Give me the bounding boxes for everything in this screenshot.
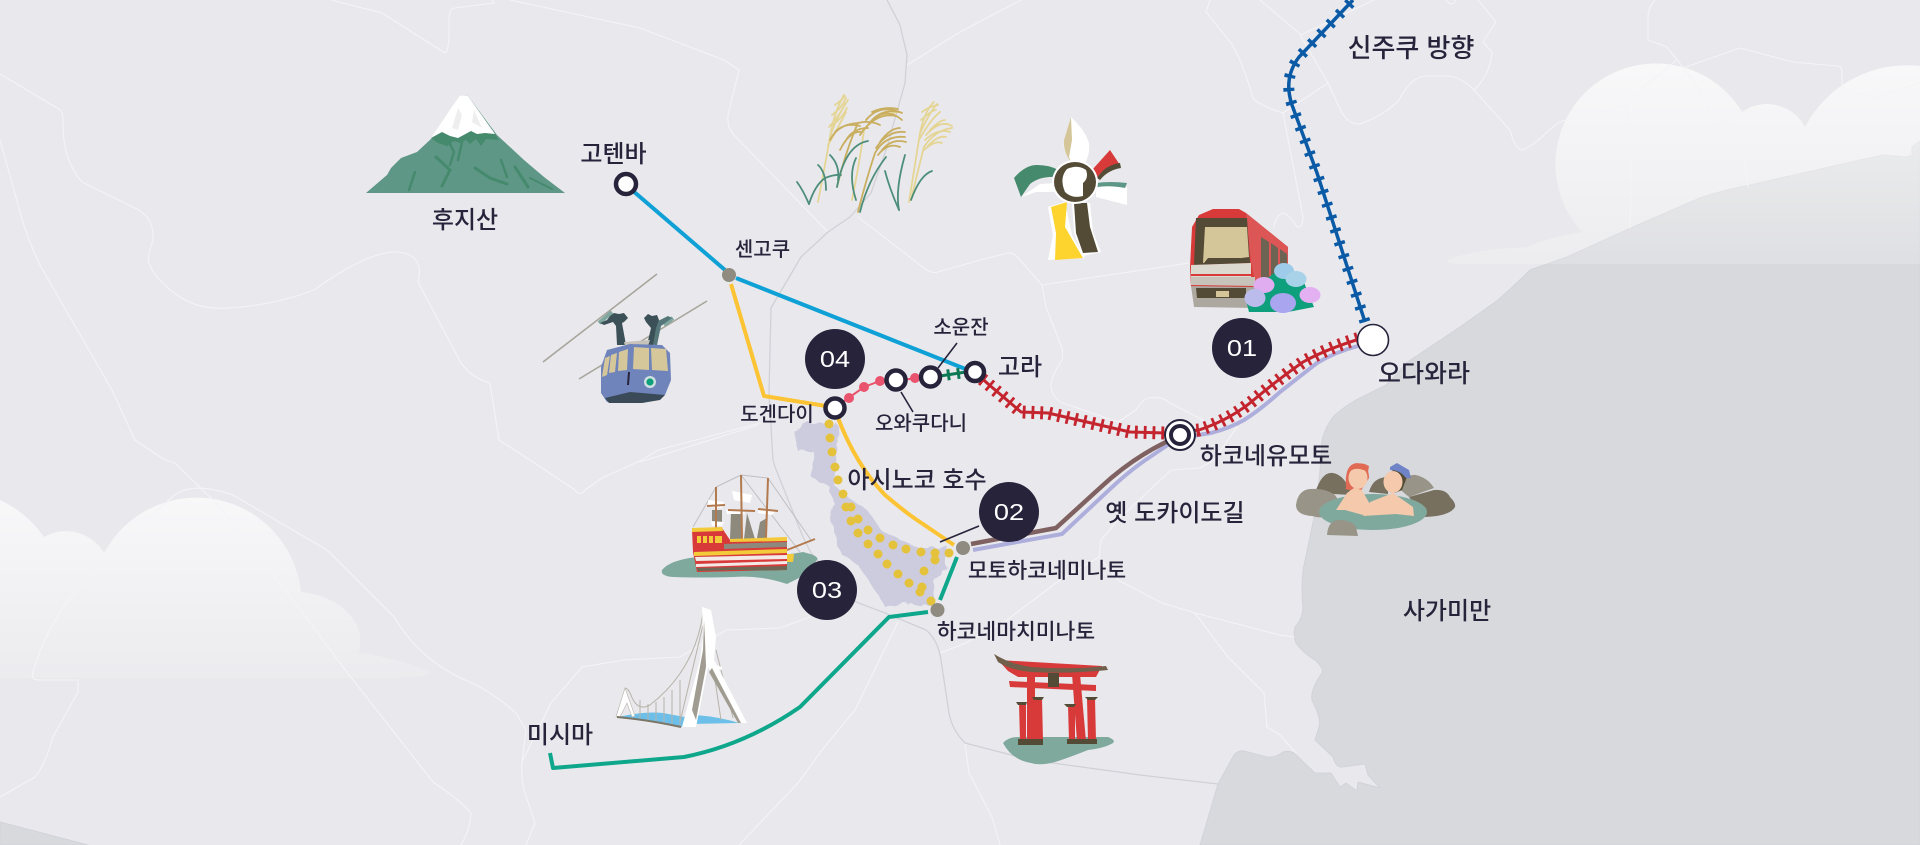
illustration: Mount Fuji [366,95,565,193]
route: yellow dotted ferry [824,420,954,606]
illustration: torii gate [994,654,1114,764]
number badges: 03 [812,578,842,603]
illustration: suspension bridge [616,607,747,727]
route: pink cable car [840,373,925,404]
route: green cable ties [940,372,966,376]
label: 후지산: 후지산 [432,207,498,234]
illustration: hot spring bathers [1296,463,1455,536]
route: brown line [971,435,1180,544]
place labels: 하코네마치미나토 [937,620,1095,644]
place labels [527,33,1491,749]
place labels: 사가미만 [1403,598,1491,625]
route: teal line [550,557,957,768]
place labels: 오다와라 [1378,360,1470,388]
illustration: pirate ship [662,475,817,584]
place labels: 신주쿠 방향 [1348,33,1474,63]
cloud: top right [1448,63,1920,264]
place labels: 센고쿠 [735,238,790,261]
place labels: 옛 도카이도길 [1105,500,1245,527]
place labels: 소운잔 [933,316,989,339]
illustration: ropeway gondola [543,274,707,403]
number badges: 04 [820,347,850,372]
place labels: 도겐다이 [740,403,814,426]
place labels: 하코네유모토 [1200,443,1332,470]
number badges: 01 [1227,336,1257,361]
place labels: 미시마 [527,722,593,749]
place labels: 고텐바 [580,141,647,168]
route: blue ropeway line [632,190,968,370]
route: yellow bus line [731,284,954,545]
place labels: 오와쿠다니 [875,412,967,435]
route: lilac line [973,346,1358,550]
number badges [797,318,1272,620]
place labels: 아시노코 호수 [847,467,987,494]
route: Odawara to Shinjuku track [1289,0,1365,322]
route: Hakone Tozan red track [975,335,1373,433]
stations [616,174,1388,617]
illustration: pampas grass [797,95,952,212]
lake: Ashinoko [793,423,948,607]
illustration: sculpture [1014,117,1127,260]
illustration: red train with hydrangeas [1190,209,1320,313]
leader lines [901,343,979,542]
cloud: bottom left [0,498,431,678]
place labels: 고라 [998,354,1042,381]
number badges: 02 [994,500,1024,525]
place labels: 모토하코네미나토 [968,559,1126,583]
